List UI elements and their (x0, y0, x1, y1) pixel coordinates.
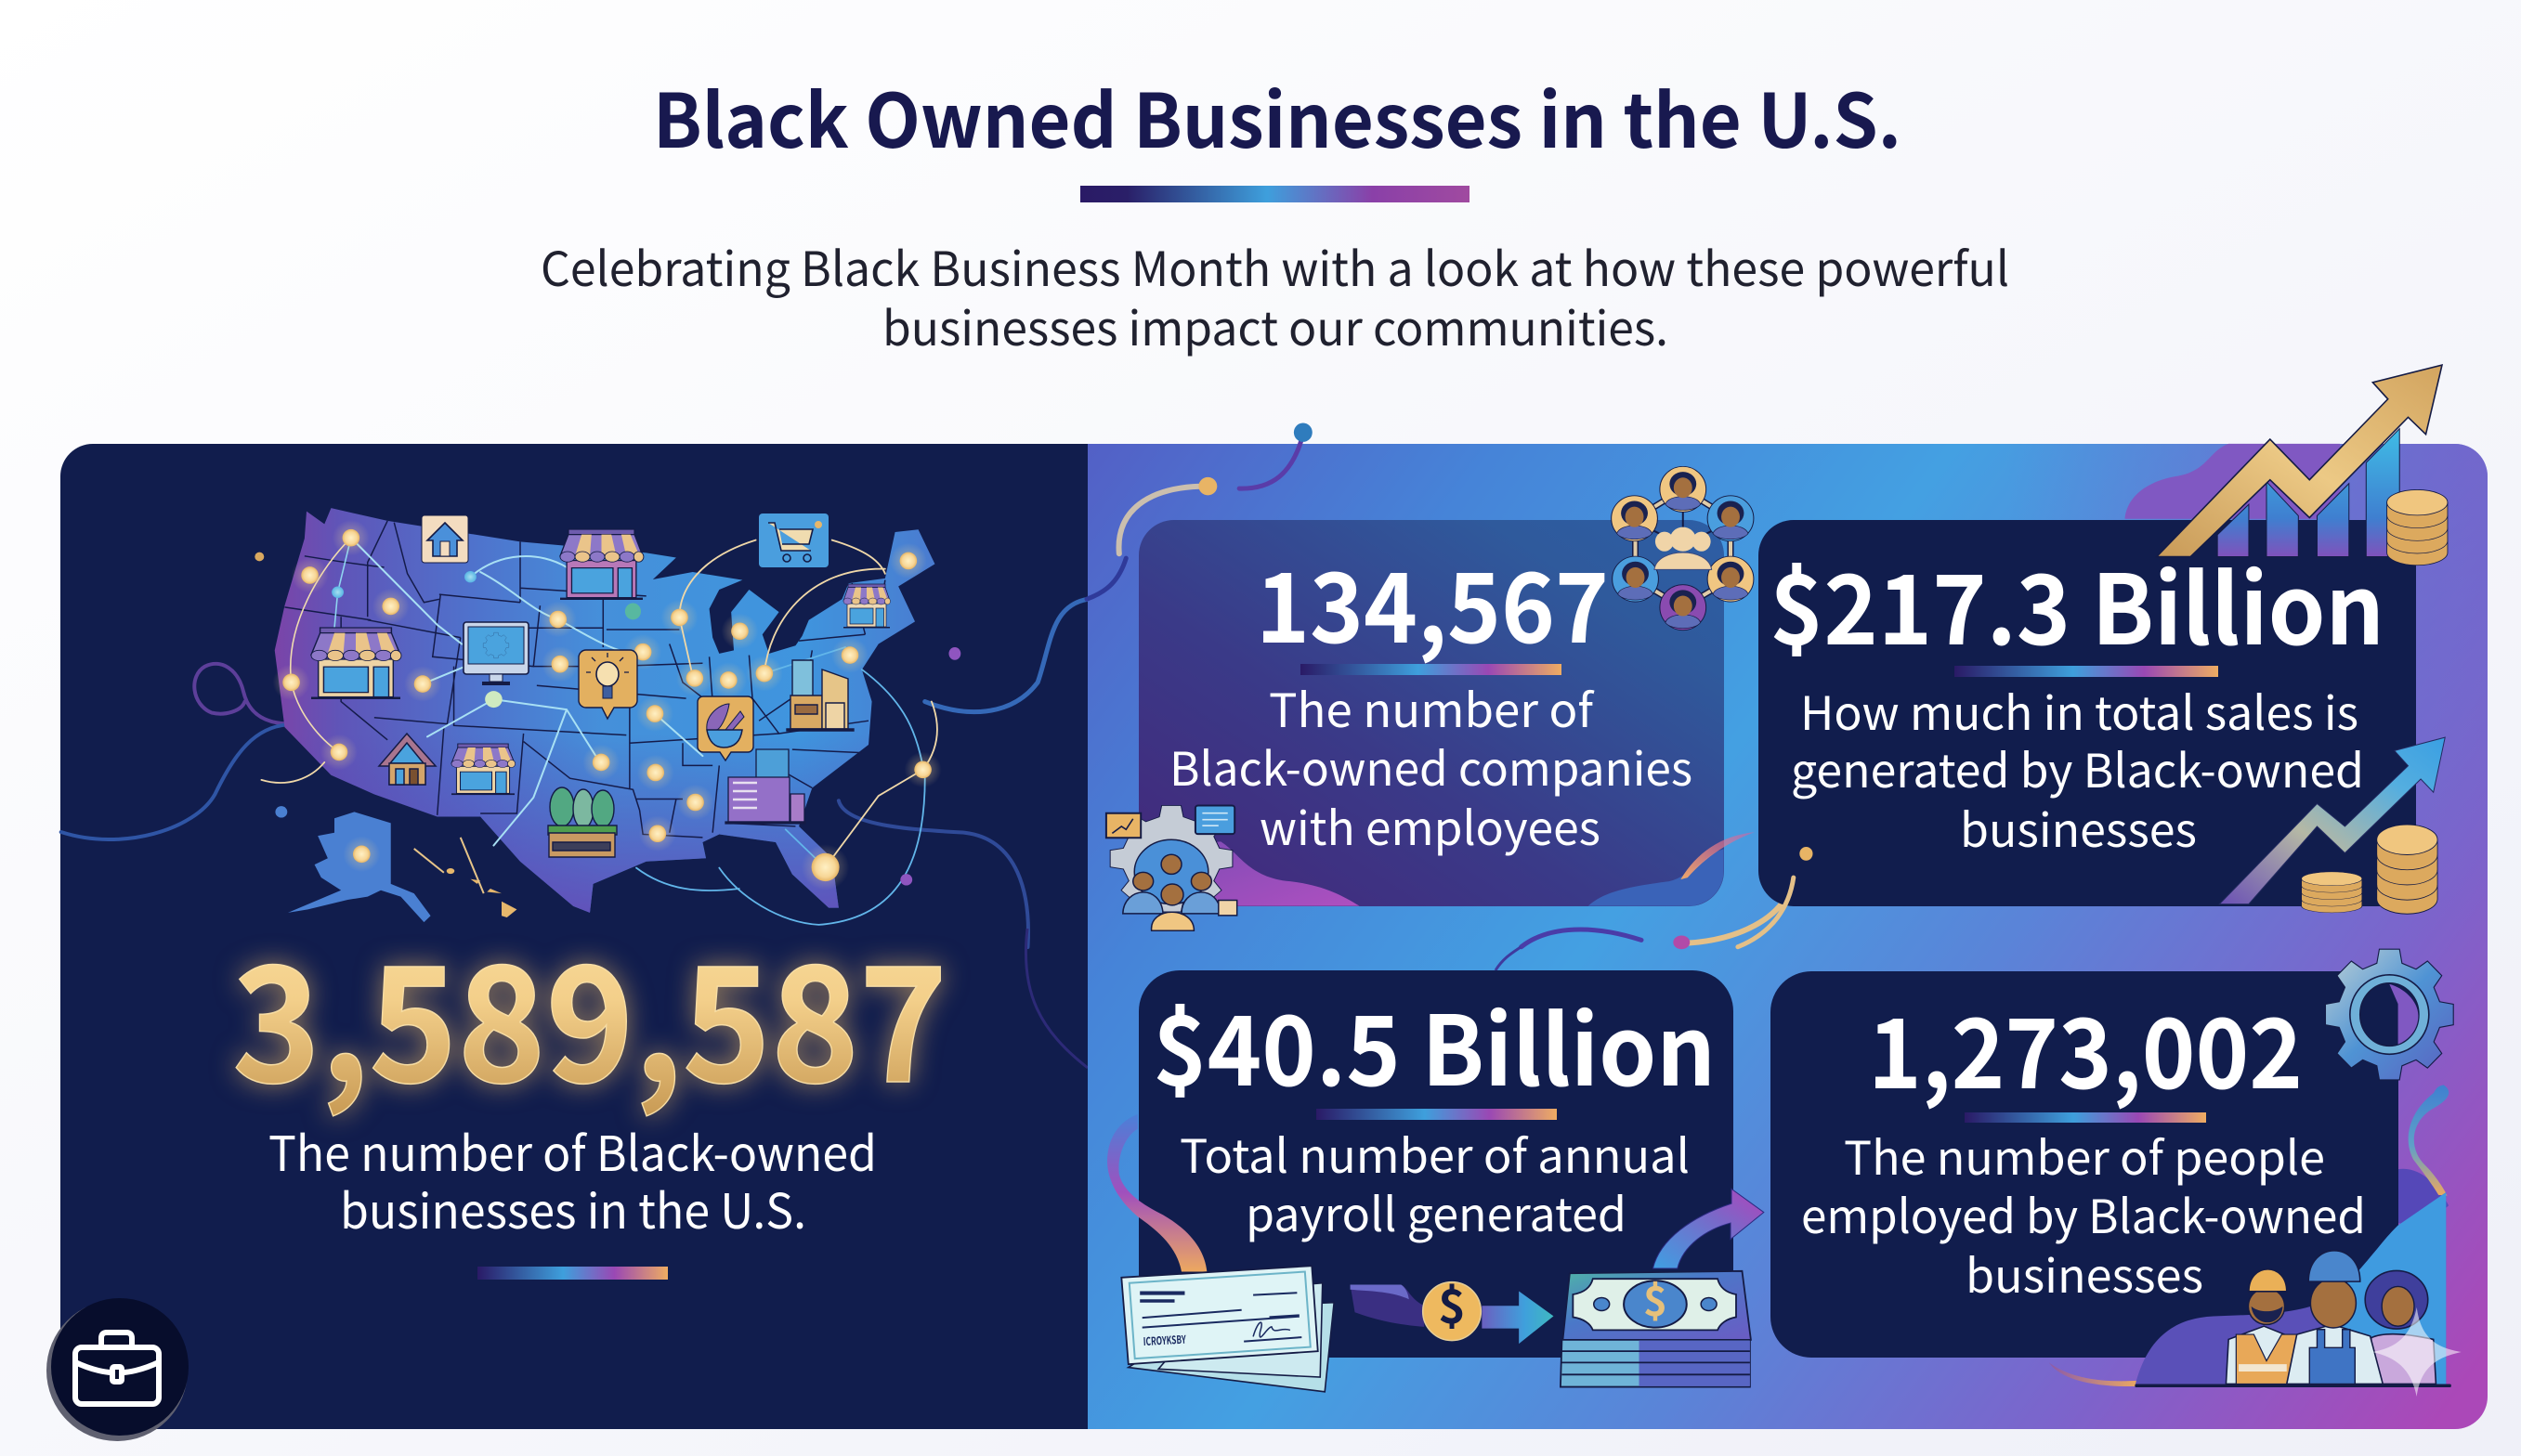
stat value: $217.3 Billion (1770, 532, 2384, 672)
stat underline (1300, 664, 1561, 675)
card: companies with employees (1106, 466, 1755, 930)
title underline (1080, 186, 1469, 202)
stat description (1801, 1122, 2366, 1306)
card: total sales (1738, 365, 2448, 947)
stat description: businesses (1966, 1240, 2203, 1306)
caption: total businesses: The number of Black-owned (268, 1115, 877, 1185)
map: route lines (261, 538, 937, 925)
check serial text: ICROYKSBY (1143, 1332, 1187, 1349)
caption: total businesses: businesses in the U.S. (340, 1173, 806, 1242)
icon: briefcase badge (46, 1298, 189, 1441)
caption: total businesses (268, 1115, 877, 1242)
icon: team gear (1106, 805, 1237, 930)
stat underline (1316, 1109, 1557, 1120)
subtitle: businesses impact our communities. (882, 291, 1668, 359)
icon: house southwest (379, 734, 436, 785)
icon: food bowl tile (698, 696, 753, 760)
subtitle: Celebrating Black Business Month with a look at how these powerful (541, 231, 2009, 300)
icon: stack of checks (1121, 1266, 1334, 1392)
icon: storefront northeast (843, 584, 890, 628)
stat value: 1,273,002 (1868, 976, 2303, 1116)
card: annual payroll (1107, 970, 1764, 1392)
icon: dollar coin and arrow (1351, 1282, 1553, 1344)
icon: trees and sign (548, 787, 617, 857)
icon: workers (2135, 1192, 2462, 1397)
stat description (1180, 1120, 1690, 1245)
icon: light bulb tile (579, 650, 637, 719)
map: Alaska (288, 812, 431, 922)
caption underline (477, 1267, 668, 1280)
icon: people network (1612, 466, 1754, 630)
chart: US map (255, 508, 960, 925)
stat description: Black-owned companies (1169, 733, 1692, 800)
map: glowing business nodes (255, 520, 960, 890)
icon: gear (2325, 949, 2453, 1080)
stat value: $40.5 Billion (1153, 973, 1716, 1113)
map: Hawaii (414, 838, 516, 917)
stat description: How much in total sales is (1800, 677, 2358, 744)
coin dollar sign: $ (1438, 1270, 1466, 1337)
cash dollar sign: $ (1643, 1268, 1667, 1328)
icon: storefront north (560, 529, 644, 600)
stat description: payroll generated (1246, 1178, 1626, 1245)
icon: city buildings (787, 660, 854, 731)
curved ribbon over card (1107, 1114, 1207, 1272)
icon: growth chart with gold arrow (2157, 365, 2448, 566)
icon: stack of cash (1561, 1189, 1764, 1387)
map: contiguous states (275, 508, 934, 913)
stat description: employed by Black-owned (1801, 1180, 2366, 1247)
connectors top (1087, 422, 1794, 949)
icon: large storefront (311, 628, 401, 699)
panel: right gradient (1087, 365, 2488, 1429)
big number: 3,589,587 (232, 896, 947, 1128)
icon: monitor with gear (464, 622, 529, 685)
stat description (1791, 677, 2364, 861)
stat description: with employees (1260, 792, 1600, 859)
icons on the map (311, 514, 890, 857)
icon: storefront southwest (451, 744, 516, 795)
stat description: The number of people (1844, 1122, 2325, 1189)
title: Black Owned Businesses in the U.S. (653, 62, 1901, 170)
stat description (1169, 674, 1692, 859)
stat underline (1965, 1112, 2206, 1123)
stat description: The number of (1269, 674, 1595, 741)
panel: total businesses (navy) (60, 444, 1088, 1429)
stat underline (1954, 666, 2218, 677)
stat description: Total number of annual (1180, 1120, 1690, 1187)
stat value: 134,567 (1256, 530, 1609, 670)
icon: office buildings purple (725, 749, 805, 824)
stat description: generated by Black-owned (1791, 734, 2364, 801)
decorative sparkle (2372, 1307, 2462, 1397)
subtitle (541, 231, 2009, 359)
icon: small arrow and coins (1738, 737, 2445, 947)
icon: house tile (422, 515, 468, 563)
icon: shopping cart tile (759, 514, 829, 567)
map connector lines outside the map (61, 599, 1088, 947)
card: people employed (1770, 949, 2462, 1397)
stat description: businesses (1960, 794, 2197, 861)
